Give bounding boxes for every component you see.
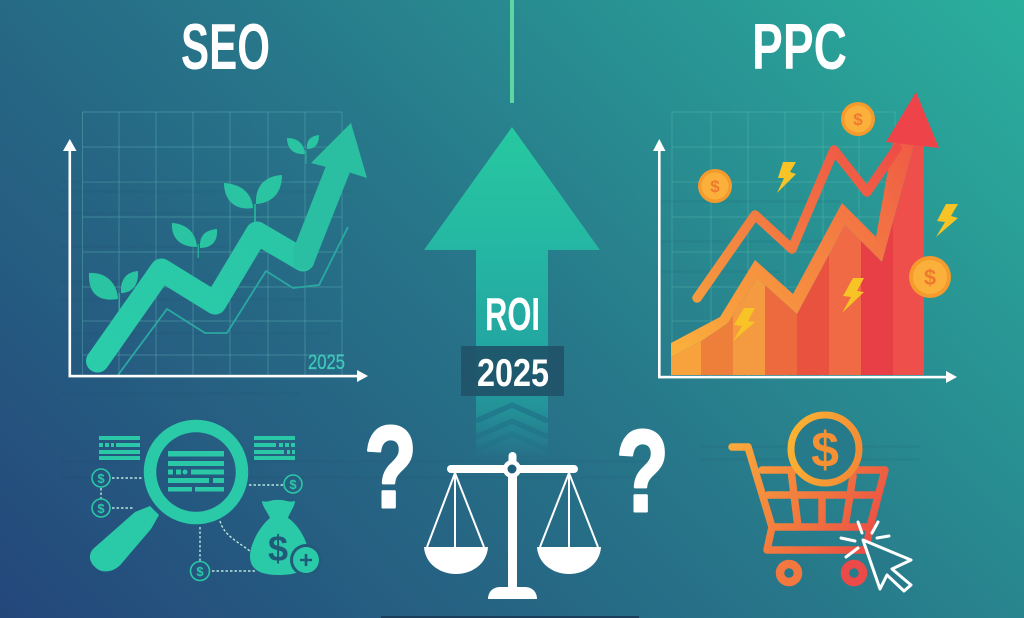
icon: left question mark: ? (364, 402, 417, 532)
coin: $ (853, 110, 863, 129)
money bag (250, 500, 322, 576)
year label: 2025 (308, 351, 345, 374)
axes (63, 139, 368, 382)
center ROI arrow (424, 127, 600, 455)
axes (653, 139, 957, 383)
money bag: $ (268, 528, 288, 569)
title: PPC: PPC (752, 10, 847, 83)
chevrons (476, 405, 548, 450)
right text block (254, 436, 295, 460)
coin (909, 256, 951, 298)
left text block (99, 436, 140, 460)
magnifier text lines (168, 451, 224, 492)
dollar coin (791, 415, 859, 483)
cart (732, 447, 885, 550)
small coins: $ (196, 564, 204, 579)
dollar coin: $ (811, 422, 839, 478)
sprouts (89, 135, 319, 311)
coin: $ (924, 265, 936, 290)
thin secondary line (118, 227, 348, 375)
magnifying glass (90, 426, 242, 571)
title: SEO: SEO (181, 10, 270, 83)
upper line (697, 148, 897, 298)
bottom edge line (381, 616, 639, 618)
small coins: $ (97, 501, 105, 516)
chart grid (672, 112, 895, 376)
year badge: 2025 (477, 352, 549, 395)
coin (698, 169, 732, 203)
small coins (92, 469, 302, 580)
coin: $ (710, 177, 720, 196)
icon: right question mark: ? (616, 406, 669, 536)
icon: shopping cart with coin and cursor (732, 415, 911, 591)
red arrow head (886, 92, 939, 148)
icon: balance scale (424, 452, 601, 599)
ROI label: ROI (485, 288, 540, 340)
click cursor (841, 522, 911, 591)
chart grid (82, 112, 342, 376)
faint background text lines (60, 180, 920, 479)
panel: SEO growth chart (63, 112, 368, 382)
cart wheels (780, 564, 863, 582)
small coins: $ (289, 477, 297, 492)
panel: PPC chart (653, 92, 958, 383)
main growth arrow (98, 123, 367, 361)
area bars (671, 130, 924, 375)
icon: SEO magnifier and money (90, 426, 322, 580)
center divider line (510, 0, 514, 103)
area top band (671, 142, 915, 357)
coin (841, 102, 875, 136)
dotted connectors (101, 478, 283, 571)
lightning bolts (733, 162, 958, 341)
small coins: $ (97, 471, 105, 486)
